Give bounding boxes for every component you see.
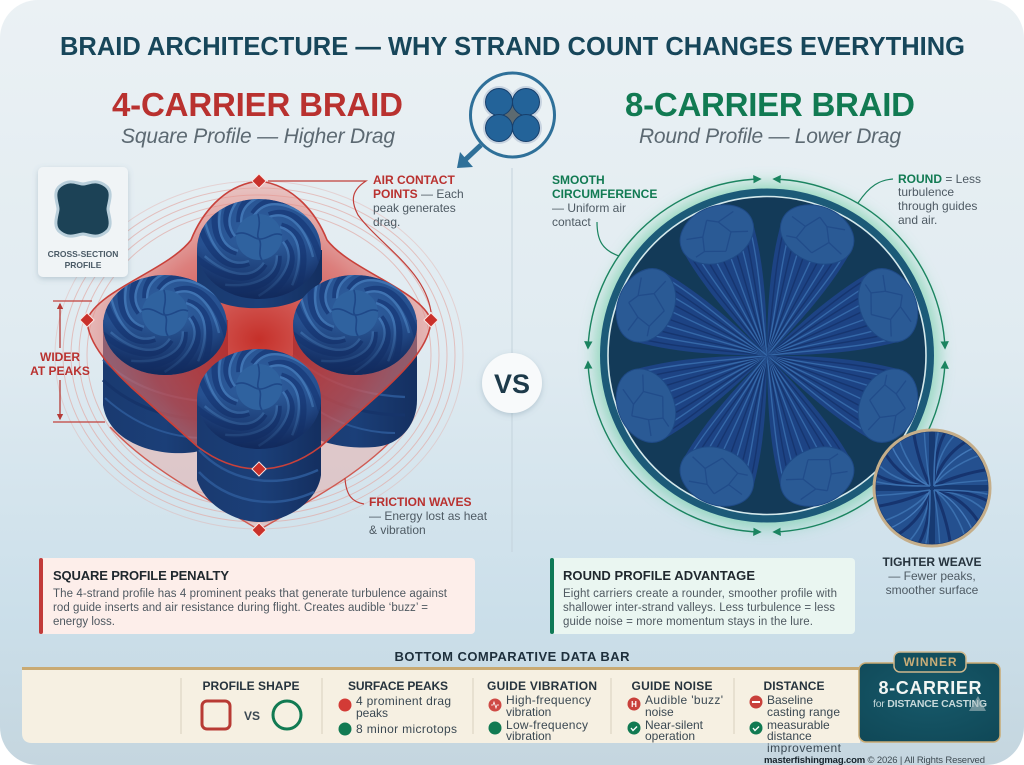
caption: tighter weave — [882, 555, 982, 597]
callout: air contact points — [268, 173, 464, 312]
callout: round equals less turbulence: and air. — [898, 213, 937, 227]
column: guide vibration: Low-frequency — [506, 718, 588, 732]
icon: cross-section profile card: CROSS-SECTION — [48, 249, 118, 259]
column: surface peaks: 4 prominent drag — [356, 694, 451, 708]
icon: cross-section profile card: PROFILE — [65, 260, 102, 270]
red square profile — [87, 181, 431, 469]
panel: square profile penalty — [39, 558, 475, 634]
heading: 8-carrier braid: 8-CARRIER BRAID — [625, 86, 915, 123]
callout: friction waves: — Energy lost as heat — [369, 509, 488, 523]
right carrier — [289, 248, 421, 382]
column: distance: measurable — [767, 718, 830, 732]
callout: air contact points: peak generates — [373, 201, 456, 215]
callout: air contact points: drag. — [373, 215, 400, 229]
column: guide noise: H — [631, 700, 637, 709]
column: distance: improvement — [767, 741, 842, 755]
green glow — [595, 184, 939, 528]
callout: round equals less turbulence — [858, 172, 981, 227]
callout: winner badge: WINNER — [904, 655, 957, 669]
left carrier — [99, 248, 231, 382]
column: profile shape — [202, 679, 301, 729]
casing — [600, 188, 934, 522]
center divider — [511, 168, 513, 552]
callout: smooth circumference: CIRCUMFERENCE — [552, 187, 657, 201]
column: guide noise: Audible 'buzz' — [645, 693, 723, 707]
panel: round profile advantage — [550, 558, 855, 634]
callout: round equals less turbulence: ROUND = Less — [898, 172, 981, 186]
callout: round equals less turbulence: through guides — [898, 199, 977, 213]
caption: tighter weave: smoother surface — [886, 583, 979, 597]
column: guide vibration: vibration — [506, 729, 551, 743]
diagram: eight-carrier braid — [588, 179, 945, 532]
column: guide noise: operation — [645, 729, 695, 743]
callout: smooth circumference: contact — [552, 215, 591, 229]
strands — [606, 194, 928, 517]
heading: 8-carrier braid — [625, 86, 915, 148]
column: distance: DISTANCE — [764, 679, 824, 693]
top carrier — [193, 172, 325, 308]
icon: tighter weave inset — [872, 428, 992, 548]
column: distance: Baseline — [767, 693, 813, 707]
column: guide noise: Near-silent — [645, 718, 704, 732]
column: profile shape: VS — [244, 709, 260, 723]
column: surface peaks: SURFACE PEAKS — [348, 679, 448, 693]
panel: round profile advantage: ROUND PROFILE ADVANTAGE — [563, 568, 755, 583]
lower friction outline — [110, 380, 405, 530]
panel: round profile advantage: Eight carriers create a rounder, smoother profile with — [563, 588, 837, 600]
column: distance: distance — [767, 729, 812, 743]
double arrows ring — [588, 179, 945, 532]
icon: versus badge — [482, 353, 542, 413]
callout: wider at peaks — [30, 301, 105, 422]
heading: 4-carrier braid — [112, 86, 403, 148]
column: surface peaks: 8 minor microtops — [356, 722, 457, 736]
column: guide noise: GUIDE NOISE — [632, 679, 712, 693]
column: guide vibration: vibration — [506, 705, 551, 719]
panel: square profile penalty: energy loss. — [53, 616, 115, 628]
column: distance: casting range — [767, 705, 840, 719]
column: guide vibration — [487, 679, 597, 743]
callout: air contact points: AIR CONTACT — [373, 173, 455, 187]
panel: square profile penalty: The 4-strand profile has 4 prominent peaks that generate turbulence against — [53, 588, 448, 600]
heading: 8-carrier braid: Round Profile — Lower Drag — [639, 125, 901, 148]
column: guide vibration: GUIDE VIBRATION — [487, 679, 597, 693]
column: surface peaks — [338, 679, 457, 736]
column: guide vibration: High-frequency — [506, 693, 591, 707]
callout: winner badge — [859, 652, 1000, 742]
callout: smooth circumference — [552, 173, 657, 256]
panel: square profile penalty: rod guide inserts and air resistance during flight. Creates audible ‘buzz’ = — [53, 602, 428, 614]
left carrier body — [103, 320, 228, 453]
callout: air contact points: POINTS — Each — [373, 187, 464, 201]
callout: winner badge: 8-CARRIER — [878, 678, 982, 698]
panel: round profile advantage: guide noise = more momentum stays in the lure. — [563, 616, 813, 628]
callout: smooth circumference: — Uniform air — [552, 201, 626, 215]
profile outline over carriers — [131, 387, 387, 469]
callout: wider at peaks: AT PEAKS — [30, 364, 90, 378]
panel: square profile penalty: SQUARE PROFILE PENALTY — [53, 568, 229, 583]
callout: winner badge: for DISTANCE CASTING — [873, 698, 987, 710]
diagram: four-carrier braid — [80, 172, 438, 537]
heading: 4-carrier braid: Square Profile — Higher Drag — [121, 125, 395, 148]
column: guide noise: noise — [645, 705, 674, 719]
icon: cross-section profile card — [38, 167, 128, 277]
column: surface peaks: peaks — [356, 706, 388, 720]
panel: comparative data bar — [22, 667, 860, 755]
callout: friction waves: FRICTION WAVES — [369, 495, 471, 509]
callout: friction waves — [345, 478, 488, 537]
title: BRAID ARCHITECTURE — WHY STRAND COUNT CHANGES EVERYTHING — [60, 33, 965, 61]
caption: tighter weave: — Fewer peaks, — [888, 569, 976, 583]
icon: versus badge: VS — [494, 369, 530, 399]
column: profile shape: PROFILE SHAPE — [202, 679, 300, 693]
panel: round profile advantage: shallower inter-strand valleys. Less turbulence = less — [563, 602, 835, 614]
callout: round equals less turbulence: turbulence — [898, 185, 954, 199]
right carrier body — [293, 320, 417, 448]
heading: 4-carrier braid: 4-CARRIER BRAID — [112, 86, 403, 123]
bar heading: BOTTOM COMPARATIVE DATA BAR — [394, 649, 630, 664]
callout: wider at peaks: WIDER — [40, 350, 80, 364]
icon: magnifier with four-strand cross-section — [457, 73, 554, 168]
front carrier — [193, 322, 325, 522]
callout: smooth circumference: SMOOTH — [552, 173, 605, 187]
callout: friction waves: & vibration — [369, 523, 426, 537]
column: guide noise — [628, 679, 723, 743]
friction waves — [55, 181, 463, 529]
caption: tighter weave: TIGHTER WEAVE — [882, 555, 982, 569]
peak markers — [80, 174, 438, 537]
column: distance — [750, 679, 842, 755]
